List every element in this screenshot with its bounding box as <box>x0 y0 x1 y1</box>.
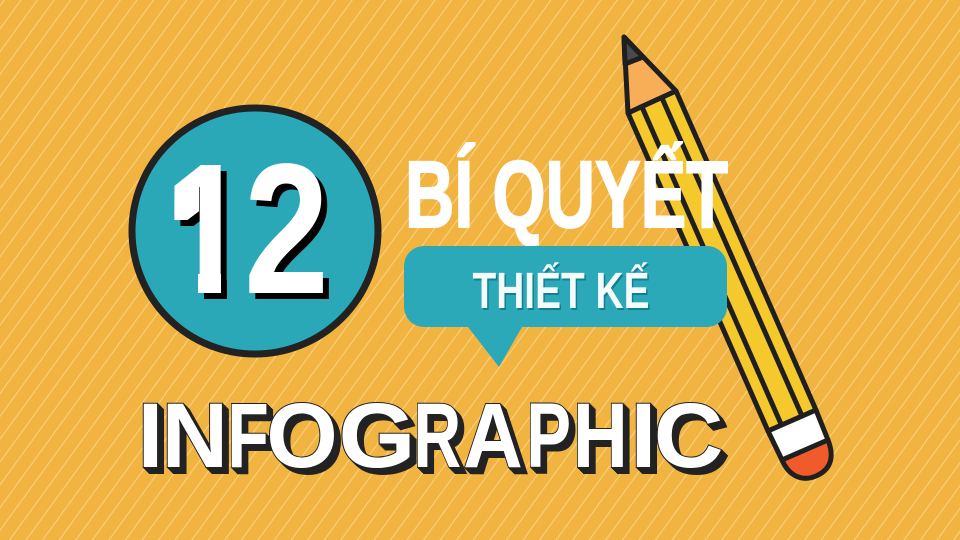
pencil wood tip <box>624 37 676 113</box>
number 12: 1 <box>170 148 255 355</box>
pencil eraser <box>782 440 831 478</box>
title: INFOGRAPHIC: I <box>631 385 656 487</box>
title: INFOGRAPHIC: O <box>266 385 338 487</box>
number 12: 1 <box>170 140 255 347</box>
title: INFOGRAPHIC: N <box>162 385 228 487</box>
number 12: 1 <box>170 132 255 339</box>
number 12: 1 <box>170 156 255 363</box>
bubble shape <box>404 246 727 367</box>
speech bubble <box>404 246 727 367</box>
title: INFOGRAPHIC: R <box>413 383 461 487</box>
number 12: 2 <box>250 132 335 339</box>
pencil lead <box>624 37 643 64</box>
badge circle <box>132 108 378 354</box>
number 12: 1 <box>164 134 249 341</box>
title: INFOGRAPHIC: P <box>526 385 571 488</box>
title: INFOGRAPHIC <box>138 383 723 488</box>
bubble text: THIẾT KẾ: THIẾT KẾ <box>474 263 651 321</box>
number 12: 1 <box>164 150 249 357</box>
pencil ferrule <box>768 410 828 460</box>
title: INFOGRAPHIC: G <box>338 384 416 487</box>
title: INFOGRAPHIC: A <box>463 384 523 487</box>
heading: BÍ QUYẾT: BÍ QUYẾT <box>405 142 728 248</box>
title: INFOGRAPHIC: H <box>573 383 628 487</box>
number 12: 1 <box>164 142 249 349</box>
number 12 <box>174 163 329 299</box>
title: INFOGRAPHIC: C <box>654 384 723 487</box>
icon: pencil <box>624 37 831 478</box>
number badge <box>132 108 378 363</box>
number 12: 2 <box>244 126 329 333</box>
title: INFOGRAPHIC: F <box>227 385 269 487</box>
pencil grooves <box>642 98 802 424</box>
pencil body <box>628 91 816 431</box>
title: INFOGRAPHIC: I <box>138 385 163 487</box>
bubble text: THIẾT KẾ: THIẾT KẾ <box>472 261 650 319</box>
number 12: 1 <box>164 126 249 333</box>
